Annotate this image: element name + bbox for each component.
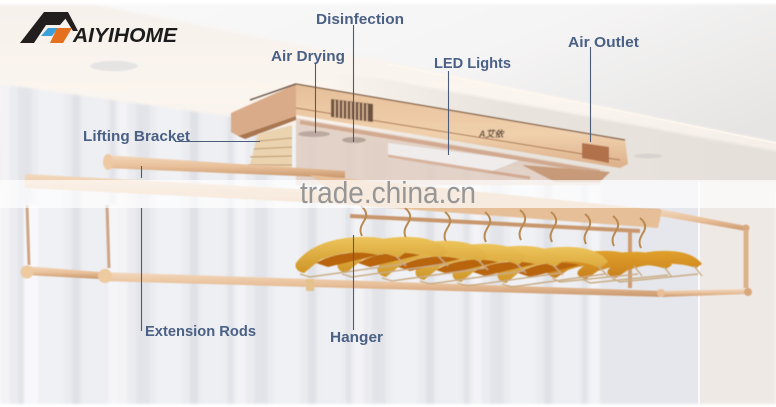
- label: Air Outlet: Air Outlet: [568, 35, 639, 51]
- lifting bracket: [248, 125, 292, 172]
- label: Hanger: [330, 235, 383, 346]
- label: Hanger: Hanger: [330, 330, 383, 346]
- label: LED Lights: [434, 56, 511, 155]
- label: Air Drying: [271, 49, 345, 133]
- ceiling fixture: [634, 154, 662, 158]
- brand mark: A艾依: [478, 129, 505, 139]
- drying rack housing: [231, 84, 628, 185]
- curtain: [0, 84, 776, 404]
- hooks: [361, 206, 645, 248]
- watermark: trade.china.cn: [300, 175, 476, 210]
- hangers: [295, 237, 702, 287]
- label: Extension Rods: Extension Rods: [145, 324, 256, 340]
- label: Air Drying: Air Drying: [271, 49, 345, 65]
- glass underside: [296, 118, 605, 185]
- right wall: [700, 182, 776, 404]
- label: Air Outlet: [568, 35, 639, 142]
- label: Lifting Bracket: Lifting Bracket: [83, 129, 190, 145]
- logo: [20, 12, 178, 47]
- end cap: [231, 84, 296, 136]
- fans: [298, 131, 330, 137]
- label: LED Lights: LED Lights: [434, 56, 511, 72]
- ceiling: [0, 5, 776, 190]
- label: Disinfection: [316, 12, 404, 142]
- rods: [20, 154, 752, 297]
- label: Disinfection: Disinfection: [316, 12, 404, 28]
- vent grille: [331, 99, 373, 122]
- window panel: [600, 182, 700, 404]
- watermark band: [0, 180, 776, 208]
- ceiling spotlight: [90, 60, 138, 72]
- front face: [296, 84, 628, 168]
- logo: AIYIHOME: [72, 25, 178, 47]
- air outlet vent: [582, 143, 609, 163]
